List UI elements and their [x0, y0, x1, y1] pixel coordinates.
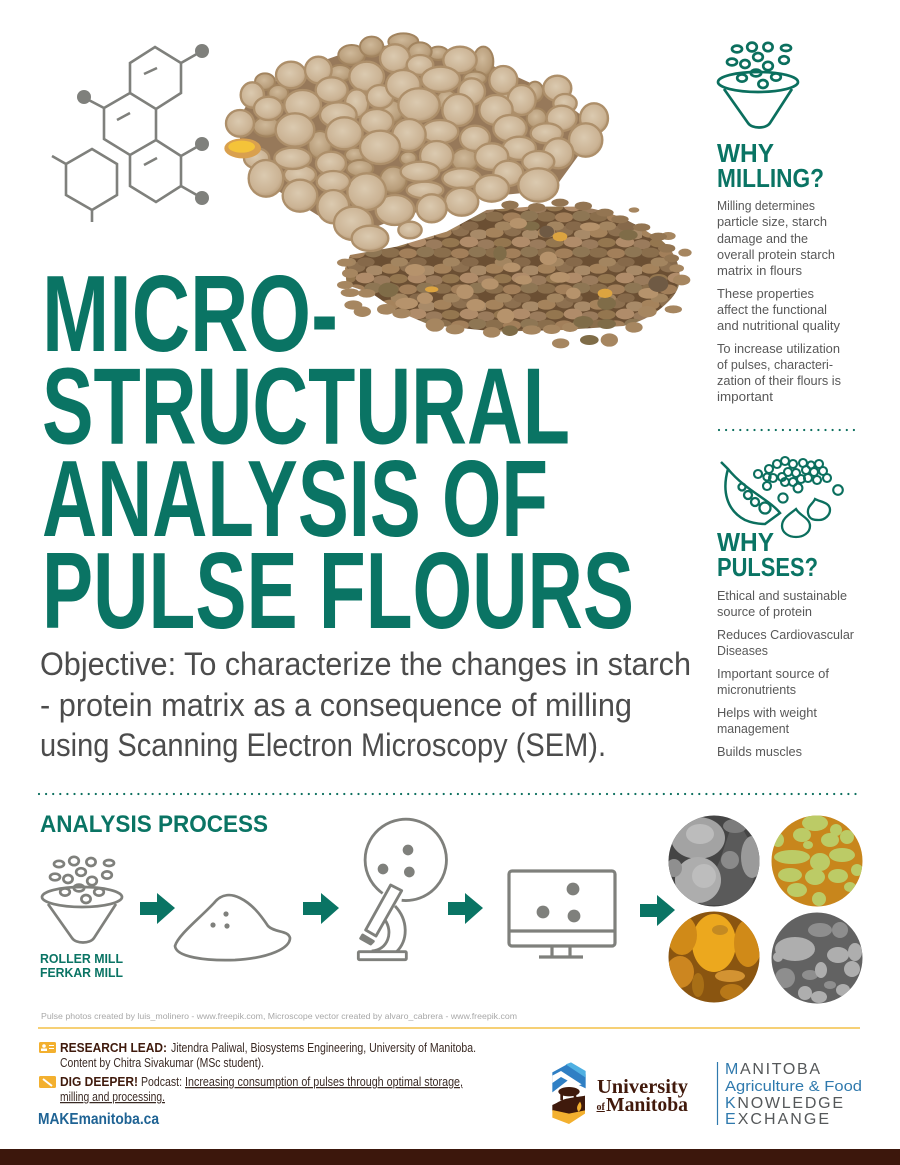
heading: why pulses: [717, 527, 818, 582]
heading: why pulses: PULSES?: [717, 552, 818, 582]
text: why milling: overall protein starch: [717, 247, 835, 262]
research lead credit: [39, 1040, 476, 1070]
title: ANALYSIS OF: [42, 438, 548, 560]
dig deeper podcast link: DIG DEEPER!: [60, 1074, 138, 1089]
logo: University of Manitoba: University: [597, 1077, 688, 1098]
logo: University of Manitoba: of: [596, 1102, 606, 1113]
text: why pulses: Helps with weight: [717, 705, 817, 720]
photo credit: Pulse photos created by luis_molinero - www.freepik.com, Microscope vector created by alvaro_cabrera - www.freepik.com: [41, 1011, 517, 1021]
text: why pulses: Reduces Cardiovascular: [717, 627, 855, 642]
title: [42, 253, 634, 652]
icon: pea pod, seeds and chickpeas: [721, 457, 843, 537]
heading: why milling: WHY: [717, 138, 774, 168]
objective text: - protein matrix as a consequence of milling: [40, 687, 632, 723]
photo: chickpeas: [224, 33, 608, 251]
dig deeper podcast link: milling and processing.: [60, 1090, 165, 1104]
research lead credit: RESEARCH LEAD:: [60, 1040, 167, 1055]
text: why milling: important: [717, 389, 773, 404]
dig deeper podcast link: [39, 1074, 463, 1104]
logo: MAKE: [718, 1061, 862, 1128]
icon: research lead: [39, 1042, 56, 1053]
logo: MAKE: KNOWLEDGE: [725, 1095, 843, 1112]
arrow 4: [640, 895, 675, 926]
text: why pulses: Builds muscles: [717, 744, 802, 759]
icon: shield: [552, 1062, 586, 1124]
text: why milling: affect the functional: [717, 302, 827, 317]
research lead credit: Content by Chitra Sivakumar (MSc student).: [60, 1056, 264, 1070]
text: why milling: and nutritional quality: [717, 318, 841, 333]
heading: why pulses: WHY: [717, 527, 774, 557]
icon: funnel with seeds, grey: [42, 857, 122, 942]
research lead credit: Jitendra Paliwal, Biosystems Engineering, University of Manitoba.: [171, 1041, 476, 1055]
photo: lentils: [337, 199, 692, 348]
label: mill types: FERKAR MILL: [40, 966, 123, 980]
objective text: Objective: To characterize the changes in starch: [40, 646, 691, 682]
arrow 2: [303, 893, 339, 924]
objective text: [40, 646, 691, 763]
icon: microscope: [358, 819, 446, 960]
text: why pulses: Ethical and sustainable: [717, 588, 847, 603]
text: why pulses: source of protein: [717, 604, 812, 619]
heading: analysis process: ANALYSIS PROCESS: [40, 811, 268, 838]
text: why pulses: management: [717, 721, 789, 736]
objective text: using Scanning Electron Microscopy (SEM).: [40, 727, 606, 763]
logo: MAKE: MANITOBA: [725, 1061, 820, 1078]
icon: dig deeper: [39, 1076, 56, 1088]
text: why milling: zation of their flours is: [717, 373, 841, 388]
image: SEM micrograph grey: [666, 815, 763, 907]
text: why pulses: Important source of: [717, 666, 829, 681]
title: PULSE FLOURS: [42, 530, 634, 652]
text: why pulses: Diseases: [717, 643, 768, 658]
text: why milling: [717, 198, 841, 404]
arrow 1: [140, 893, 175, 924]
footer bar: [0, 1149, 900, 1165]
logo: MAKE: EXCHANGE: [725, 1111, 829, 1128]
text: why pulses: [717, 588, 855, 759]
icon: molecule: [52, 44, 209, 222]
text: why milling: These properties: [717, 286, 814, 301]
heading: why milling: MILLING?: [717, 163, 824, 193]
icon: flour pile: [175, 895, 290, 960]
text: why milling: Milling determines: [717, 198, 815, 213]
text: why milling: damage and the: [717, 231, 808, 246]
arrow 3: [448, 893, 483, 924]
label: mill types: ROLLER MILL: [40, 952, 123, 966]
image: SEM micrograph dark grey: [771, 912, 863, 1004]
text: why milling: matrix in flours: [717, 263, 802, 278]
title: MICRO-: [42, 253, 338, 375]
image: SEM micrograph green: [771, 815, 863, 907]
text: why milling: of pulses, characteri-: [717, 357, 833, 372]
image: SEM micrograph orange: [666, 911, 762, 1003]
dig deeper podcast link: Podcast:: [141, 1075, 182, 1089]
icon: computer monitor: [509, 871, 615, 957]
logo: University of Manitoba: [552, 1062, 688, 1124]
website link: MAKEmanitoba.ca: [38, 1111, 159, 1128]
label: mill types: [40, 952, 123, 980]
text: why pulses: micronutrients: [717, 682, 796, 697]
text: why milling: particle size, starch: [717, 214, 827, 229]
icon: funnel with seeds, teal: [718, 43, 798, 128]
text: why milling: To increase utilization: [717, 341, 840, 356]
logo: MAKE: Agriculture & Food: [725, 1078, 862, 1095]
logo: University of Manitoba: Manitoba: [606, 1094, 688, 1116]
title: STRUCTURAL: [42, 346, 570, 468]
heading: why milling: [717, 138, 824, 193]
photo: pulses pile: [224, 33, 692, 348]
dig deeper podcast link: Increasing consumption of pulses through optimal storage,: [185, 1075, 463, 1089]
